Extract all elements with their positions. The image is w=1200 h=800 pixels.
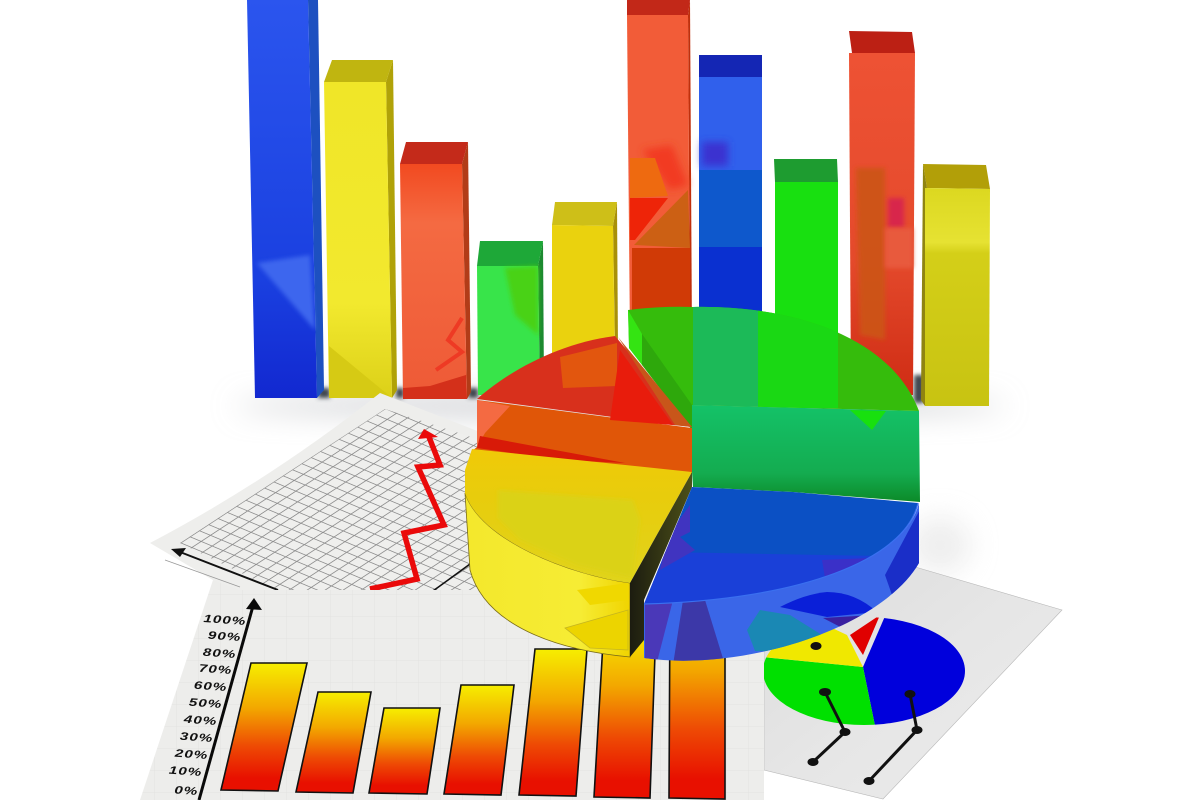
axis labels: 0% [174, 783, 199, 797]
bar: red right [849, 31, 915, 395]
bar: blue with reflections [699, 55, 762, 320]
sheet: paper with pie chart [764, 519, 1062, 800]
bar: red [400, 142, 471, 399]
illustration: 3D charts over paper graphs [140, 0, 1062, 800]
arrow: black axis [165, 548, 470, 591]
bar: bright green [774, 159, 838, 340]
bar: tall red with reflections [627, 0, 692, 340]
axis labels: 20% [173, 747, 209, 761]
sheet: grid paper with red arrow line [150, 393, 480, 600]
arrow: y axis [199, 598, 262, 800]
bar: dark yellow [552, 202, 618, 360]
bar: tall blue [247, 0, 324, 398]
pointer lines [809, 644, 921, 784]
axis labels: 60% [193, 679, 228, 693]
axis labels: 10% [168, 764, 203, 778]
small pie chart [764, 617, 965, 725]
pie chart: large 3D pie [465, 300, 930, 670]
slice: green [620, 300, 930, 502]
axis labels: 80% [202, 646, 237, 660]
axis labels: 70% [198, 662, 233, 676]
arrow: red zigzag trend [370, 429, 444, 589]
bar: yellow right [921, 164, 990, 406]
slice: yellow [465, 449, 692, 657]
axis labels: 90% [207, 629, 242, 643]
bar chart: back row of 3D bars [247, 0, 990, 406]
axis labels: 40% [182, 713, 218, 727]
axis labels: 50% [188, 696, 223, 710]
bar: green [477, 241, 544, 395]
axis labels: 100% [203, 612, 247, 627]
gradient bars [221, 600, 725, 799]
slice: blue [644, 487, 919, 661]
axis labels: 30% [179, 730, 214, 744]
divider between yellow and blue [630, 472, 692, 657]
slice: red [472, 336, 692, 474]
bar: yellow [324, 60, 397, 398]
axis labels [168, 612, 247, 797]
floor shadow under the back bars [235, 375, 1005, 415]
sheet: paper with percentage bar chart [140, 580, 764, 800]
